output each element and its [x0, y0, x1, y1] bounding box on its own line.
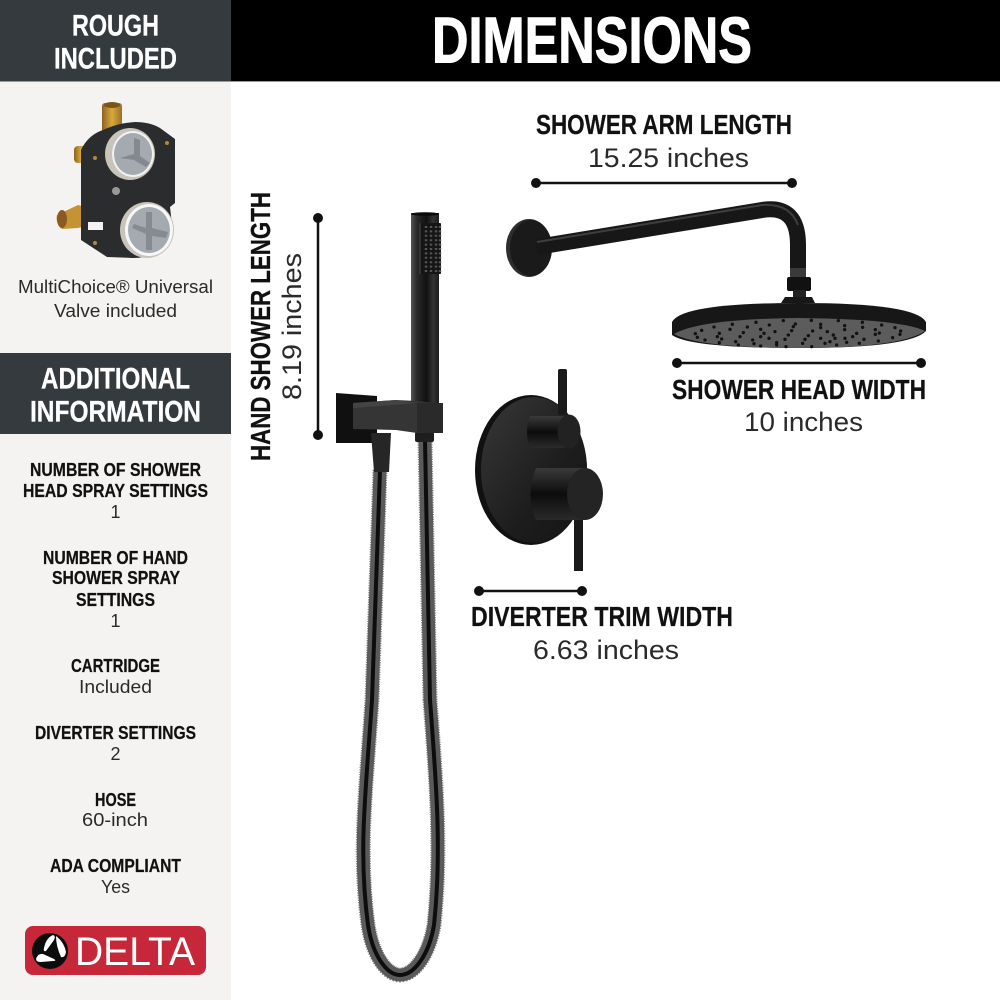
spec: shower head spray settings: HEAD SPRAY SETTINGS	[23, 480, 208, 501]
heading: additional information: ADDITIONAL	[41, 362, 190, 396]
spec: shower head spray settings: 1	[110, 502, 121, 522]
spec: cartridge	[71, 655, 160, 697]
panel: left sidebar	[0, 0, 231, 1000]
dimension: shower arm length	[531, 109, 797, 188]
heading: rough included	[0, 0, 231, 81]
dimension: shower head width: SHOWER HEAD WIDTH	[672, 374, 926, 405]
spec: diverter settings: DIVERTER SETTINGS	[35, 722, 196, 743]
text: valve caption: Valve included	[54, 301, 177, 321]
spec: hand shower spray settings: SHOWER SPRAY	[52, 567, 181, 588]
dimension: diverter trim width: 6.63 inches	[533, 635, 679, 665]
dimension: shower head width: 10 inches	[744, 407, 863, 437]
dimension: diverter trim width	[471, 586, 733, 665]
heading: additional information: INFORMATION	[30, 396, 201, 428]
dimension: shower head width	[672, 358, 926, 437]
spec: ada compliant: Yes	[101, 877, 130, 897]
dimension: hand shower length: HAND SHOWER LENGTH	[245, 192, 276, 461]
spec: hand shower spray settings: SETTINGS	[76, 589, 155, 610]
text: valve caption	[18, 277, 213, 321]
spec: cartridge: CARTRIDGE	[71, 655, 160, 676]
heading: dimensions	[231, 0, 1000, 81]
illustration: hose	[363, 440, 438, 975]
spec: cartridge: Included	[79, 677, 152, 697]
dimension: hand shower length	[245, 192, 323, 461]
heading: rough included: ROUGH	[72, 10, 159, 42]
dimension: shower arm length: SHOWER ARM LENGTH	[536, 109, 792, 140]
spec: ada compliant	[50, 855, 182, 897]
spec: hose	[82, 789, 148, 830]
spec: hose: 60-inch	[82, 810, 148, 830]
spec: hand shower spray settings	[43, 547, 188, 631]
spec: diverter settings	[35, 722, 196, 764]
heading: additional information	[0, 353, 231, 434]
logo: delta	[25, 926, 206, 975]
dimension: diverter trim width: DIVERTER TRIM WIDTH	[471, 601, 733, 632]
spec: hand shower spray settings: NUMBER OF HAND	[43, 547, 188, 568]
illustration: shower arm and head	[506, 205, 926, 348]
spec: diverter settings: 2	[110, 744, 121, 764]
spec: shower head spray settings	[23, 459, 208, 522]
illustration: diverter trim	[475, 369, 603, 571]
spec: shower head spray settings: NUMBER OF SHOWER	[30, 459, 201, 480]
logo: delta: DELTA	[75, 930, 195, 974]
text: valve caption: MultiChoice® Universal	[18, 277, 213, 297]
spec: hose: HOSE	[95, 789, 136, 810]
illustration: hand shower and bracket	[336, 212, 443, 472]
heading: dimensions: DIMENSIONS	[432, 4, 752, 76]
spec: hand shower spray settings: 1	[110, 611, 121, 631]
heading: rough included: INCLUDED	[54, 42, 177, 76]
dimension: hand shower length: 8.19 inches	[277, 253, 307, 400]
dimension: shower arm length: 15.25 inches	[588, 143, 749, 173]
icon: rough-in valve	[57, 102, 175, 258]
spec: ada compliant: ADA COMPLIANT	[50, 855, 182, 876]
